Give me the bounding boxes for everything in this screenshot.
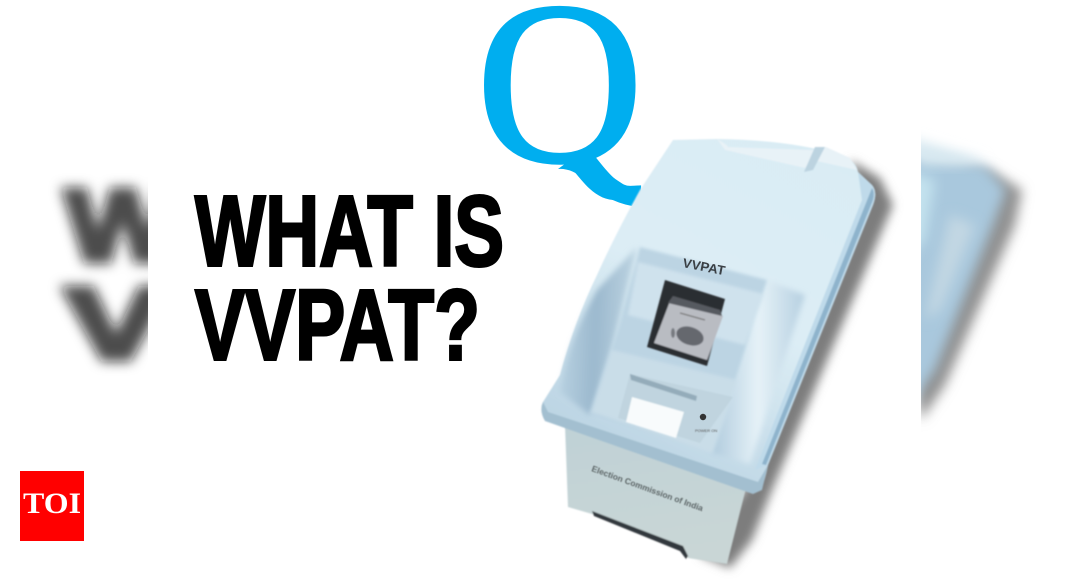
blurred backdrop: left title echo xyxy=(54,178,148,372)
right arch with highlight xyxy=(712,280,805,464)
left arch shading xyxy=(560,247,637,415)
title: WHAT IS VVPAT?: WHAT IS xyxy=(195,176,504,288)
TOI logo: TOI xyxy=(23,487,81,520)
paper slip tray xyxy=(618,374,733,443)
VVPAT label on the panel: VVPAT xyxy=(681,255,727,278)
machine lid xyxy=(541,139,875,494)
VVPAT machine illustration xyxy=(541,139,893,568)
viewing window xyxy=(647,280,725,366)
indicator lamp xyxy=(700,414,706,420)
base label: Election Commission of India: Election Commission of India xyxy=(590,464,705,513)
blurred backdrop: right machine echo xyxy=(921,136,1029,422)
front control panel xyxy=(590,247,767,453)
title: WHAT IS VVPAT? xyxy=(195,176,504,382)
TOI logo xyxy=(20,471,84,541)
machine drop shadow xyxy=(700,160,893,568)
title: WHAT IS VVPAT?: VVPAT? xyxy=(195,270,480,382)
blurred backdrop: left title echo: WH xyxy=(66,170,266,282)
machine base box xyxy=(565,425,746,564)
tiny lamp caption: POWER ON xyxy=(695,428,717,433)
blurred backdrop: left title echo: VV xyxy=(66,268,266,380)
